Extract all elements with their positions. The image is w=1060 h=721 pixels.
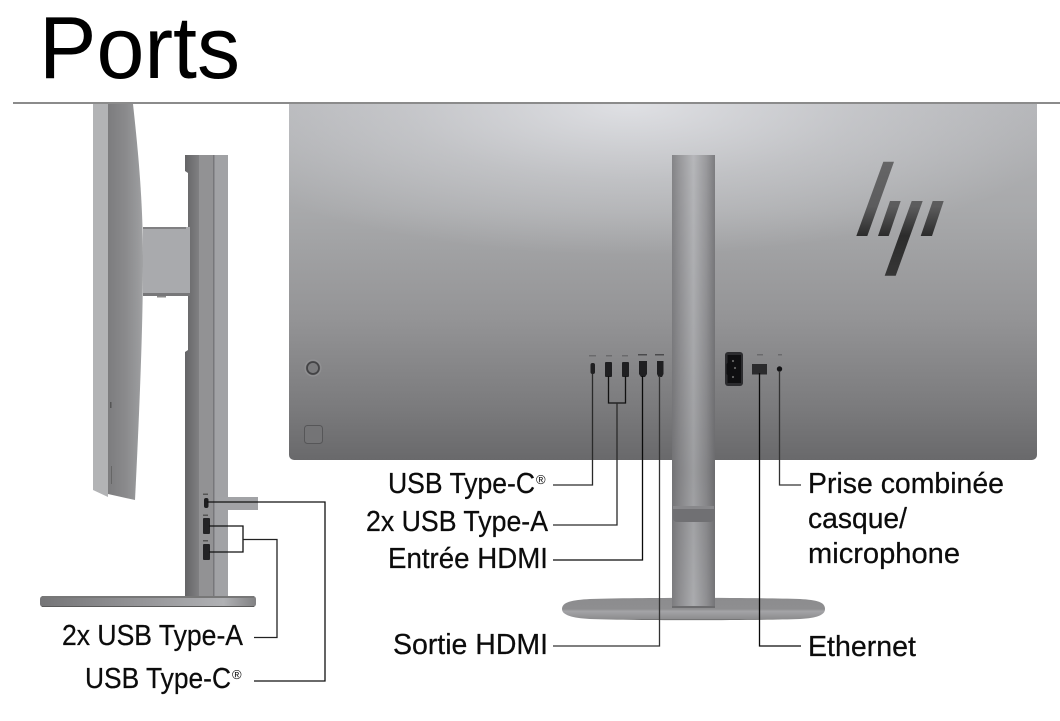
- rear ports: [589, 352, 782, 386]
- callout: Prise combinée casque/microphone: [780, 371, 1004, 570]
- rear stand: [562, 155, 825, 620]
- callout: Prise combinée casque/microphone: Prise combinée: [808, 468, 1004, 500]
- callout: side 2x USB Type-A: 2x USB Type-A: [62, 620, 244, 652]
- icon: joystick knob: [305, 360, 321, 376]
- header rule: [13, 102, 1060, 104]
- callout: rear 2x USB Type-A: [366, 376, 626, 538]
- callout: Prise combinée casque/microphone: microphone: [808, 538, 960, 570]
- cable clip: [673, 506, 714, 522]
- callout: side USB Type-C: [85, 502, 325, 695]
- rear view monitor: [289, 104, 1037, 620]
- stand, side: [185, 155, 228, 596]
- power socket: [725, 352, 743, 386]
- callout: rear USB Type-C: ®: [536, 472, 546, 487]
- hinge bracket: [143, 227, 190, 298]
- callout: Sortie HDMI: [393, 376, 660, 661]
- side view monitor: [40, 104, 258, 607]
- icon: power button: [304, 426, 322, 444]
- callout: Entrée HDMI: Entrée HDMI: [388, 543, 548, 575]
- rear base: [562, 598, 825, 620]
- callout: Sortie HDMI: Sortie HDMI: [393, 629, 548, 661]
- side ports: [203, 494, 258, 560]
- rear column: [672, 155, 715, 608]
- icon: HP logo: [856, 162, 944, 276]
- callout: side USB Type-C: ®: [232, 667, 242, 682]
- monitor panel, side: [93, 104, 143, 500]
- base, side: [40, 596, 256, 607]
- callout: Ethernet: Ethernet: [808, 631, 916, 663]
- rear panel: [289, 104, 1037, 460]
- callout: rear USB Type-C: [388, 374, 592, 500]
- callout: Entrée HDMI: [388, 376, 642, 575]
- callout: Prise combinée casque/microphone: casque/: [808, 503, 908, 535]
- callout: side 2x USB Type-A: [62, 526, 277, 652]
- callout: Ethernet: [760, 373, 916, 663]
- ethernet port: [752, 364, 767, 374]
- headphone jack: [777, 366, 782, 372]
- title: Ports: [39, 0, 240, 97]
- callout: side USB Type-C: USB Type-C: [85, 663, 231, 695]
- callout: rear USB Type-C: USB Type-C: [388, 468, 535, 500]
- callout: rear 2x USB Type-A: 2x USB Type-A: [366, 506, 549, 538]
